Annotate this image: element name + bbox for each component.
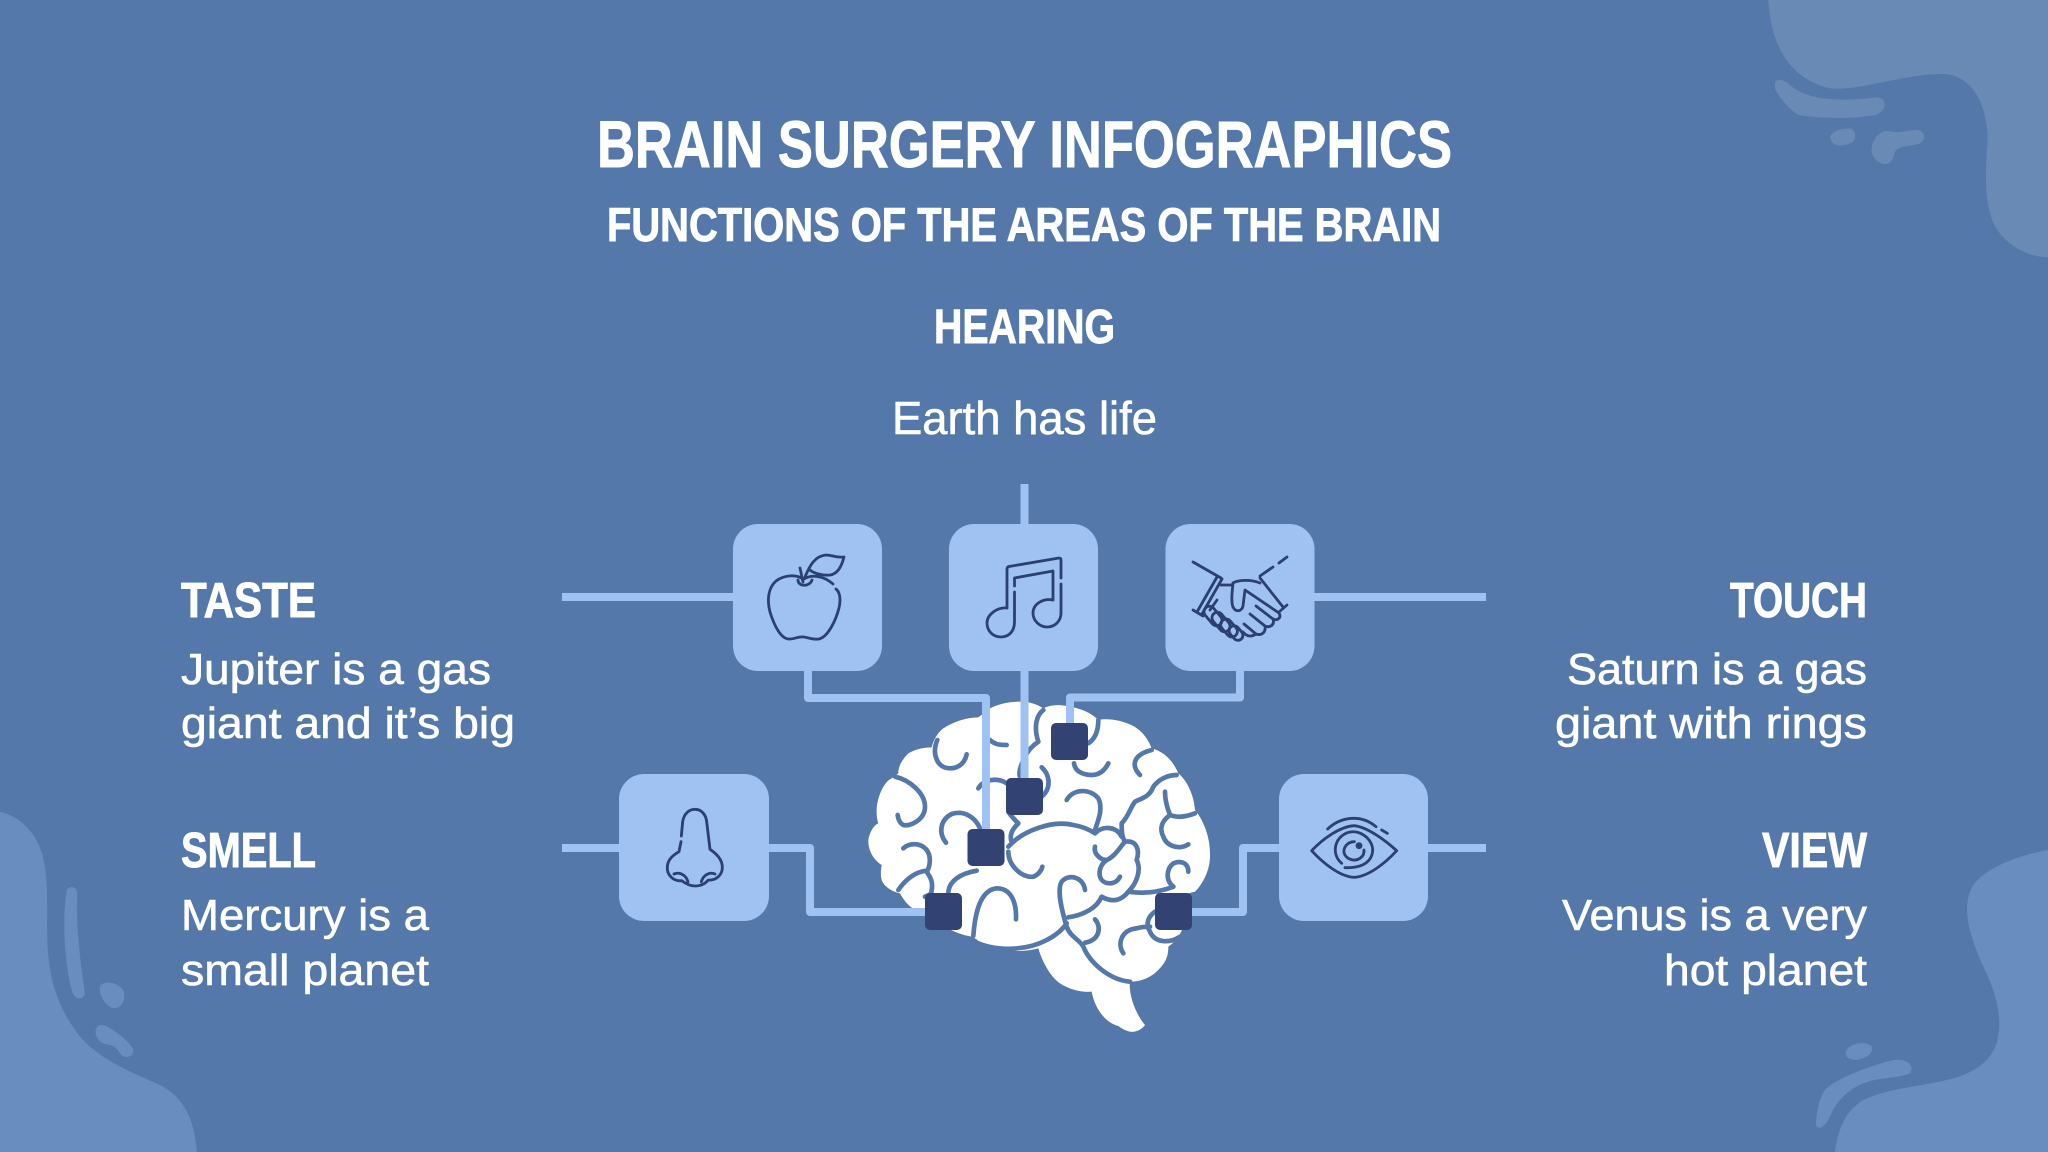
- label: taste: TASTE: [181, 574, 316, 628]
- label: smell: small planet: [181, 946, 429, 995]
- label: touch: giant with rings: [1555, 699, 1867, 748]
- icon tile: nose: [619, 774, 769, 921]
- icon tile: eye: [1279, 774, 1428, 921]
- label: taste: giant and it’s big: [181, 699, 515, 748]
- label: view: VIEW: [1762, 824, 1868, 878]
- label: view: Venus is a very: [1562, 891, 1867, 940]
- brain illustration: [868, 702, 1210, 1032]
- label: touch: [1555, 574, 1867, 748]
- title: BRAIN SURGERY INFOGRAPHICS: [597, 107, 1452, 181]
- label: touch: Saturn is a gas: [1567, 645, 1867, 694]
- label: taste: [181, 574, 515, 748]
- label: hearing: [892, 301, 1157, 444]
- connector nodes: [925, 723, 1192, 930]
- icon tile: handshake: [1166, 524, 1314, 671]
- icon tile: music note: [949, 524, 1098, 671]
- label: smell: [181, 824, 430, 995]
- label: view: hot planet: [1664, 946, 1867, 995]
- label: taste: Jupiter is a gas: [181, 645, 491, 694]
- label: view: [1562, 824, 1868, 995]
- decorative blob: bottom left: [0, 812, 197, 1152]
- brain folds: [895, 710, 1195, 982]
- label: hearing: HEARING: [934, 301, 1115, 354]
- decorative blob: bottom right: [1816, 850, 2048, 1152]
- decorative blob: top right: [1768, 0, 2048, 257]
- label: touch: TOUCH: [1730, 574, 1867, 628]
- subtitle: FUNCTIONS OF THE AREAS OF THE BRAIN: [607, 198, 1441, 251]
- label: smell: Mercury is a: [181, 891, 430, 940]
- label: hearing: Earth has life: [892, 392, 1157, 444]
- icon tile: apple: [733, 524, 882, 671]
- connector lines: [562, 484, 1486, 912]
- label: smell: SMELL: [181, 824, 316, 878]
